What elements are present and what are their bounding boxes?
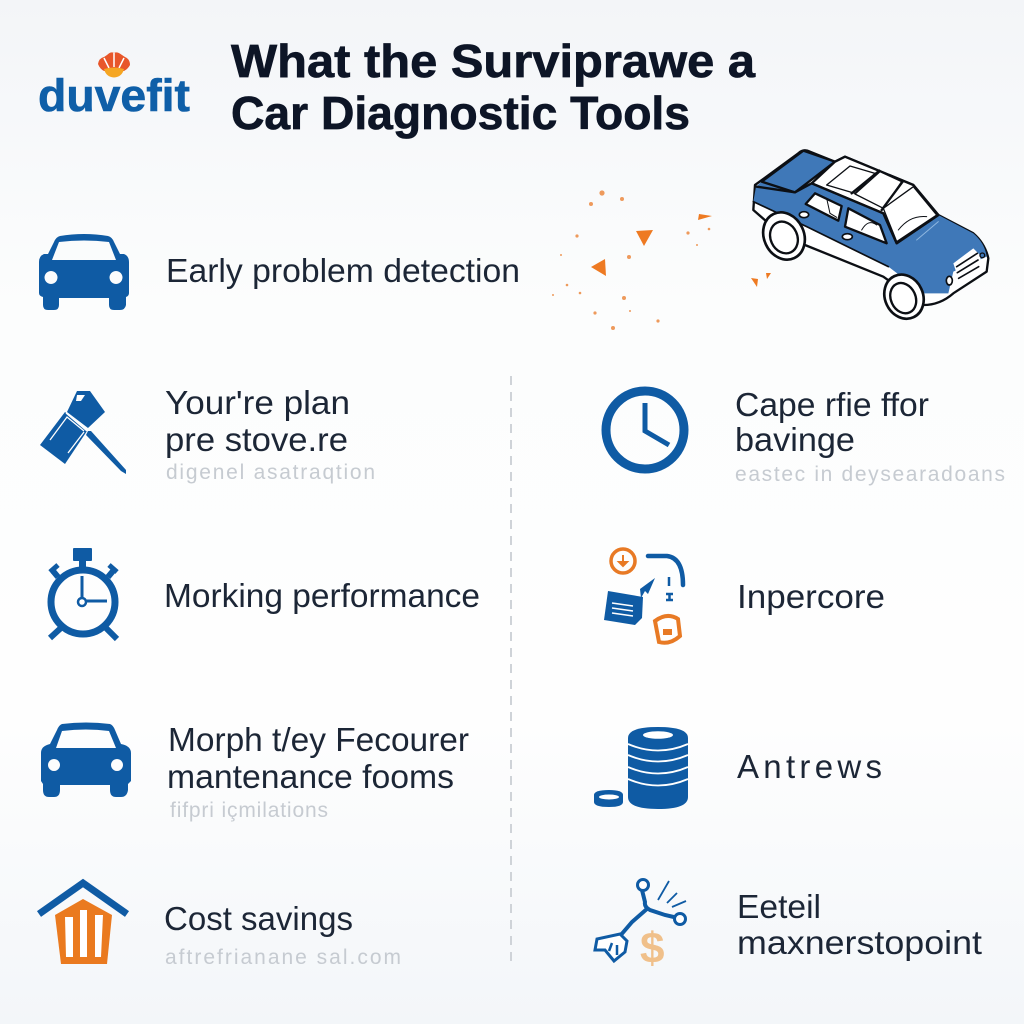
item: cape rfie for bavinge: eastec in deysearadoans: [735, 463, 1005, 486]
item: cape rfie for bavinge: [606, 386, 1005, 486]
title: [231, 35, 755, 139]
rear wheel: [877, 268, 931, 325]
item: morking performance: Morking performance: [164, 577, 480, 614]
item: your're plan: digenel asatraqtion: [166, 461, 375, 484]
icon: car: [39, 234, 129, 310]
item: cost savings: [39, 883, 401, 969]
item: maintenance forms: fifpri içmilations: [170, 799, 328, 822]
item: your're plan: [40, 384, 375, 484]
item: maintenance forms: mantenance fooms: [167, 758, 454, 795]
icon: branching tool with dollar sign: $: [640, 924, 664, 973]
icon: stopwatch: [50, 548, 117, 639]
decorative orange particles: [552, 190, 771, 330]
item: morking performance: [50, 548, 480, 639]
front wheel: [756, 205, 812, 267]
item: your're plan: Your're plan: [165, 384, 350, 421]
icon: branching tool with dollar sign: [595, 880, 686, 973]
item: inpercore: [604, 549, 885, 643]
icon: parts and document: [604, 549, 683, 643]
item: early problem detection: Early problem detection: [166, 252, 520, 289]
icon: coin stack: [594, 727, 688, 809]
item: cape rfie for bavinge: Cape rfie ffor: [735, 386, 929, 423]
item: cost savings: Cost savings: [164, 900, 353, 937]
logo: duvefit: duvefit: [38, 70, 190, 121]
icon: house: [39, 883, 127, 964]
item: inpercore: Inpercore: [737, 578, 885, 615]
title: What the Surviprawe a: [231, 35, 755, 87]
item: early problem detection: [39, 234, 520, 310]
item: maintenance forms: [41, 721, 469, 822]
item: eeteil maxnerstopoint: Eeteil: [737, 888, 821, 925]
item: eeteil maxnerstopoint: maxnerstopoint: [737, 924, 982, 961]
illustration: blue pickup car: [753, 150, 988, 325]
logo mark: [98, 52, 130, 78]
item: antrews: Antrews: [737, 748, 882, 785]
item: your're plan: pre stove.re: [165, 421, 348, 458]
title: Car Diagnostic Tools: [231, 87, 690, 139]
icon: clock: [606, 391, 684, 469]
item: maintenance forms: Morph t/ey Fecourer: [168, 721, 469, 758]
item: cost savings: aftrefrianane sal.com: [165, 946, 401, 969]
icon: hammer tool: [40, 391, 126, 474]
icon: car: [41, 722, 131, 797]
item: cape rfie for bavinge: bavinge: [735, 421, 855, 458]
item: eeteil maxnerstopoint: [595, 880, 982, 973]
item: antrews: [594, 727, 882, 809]
